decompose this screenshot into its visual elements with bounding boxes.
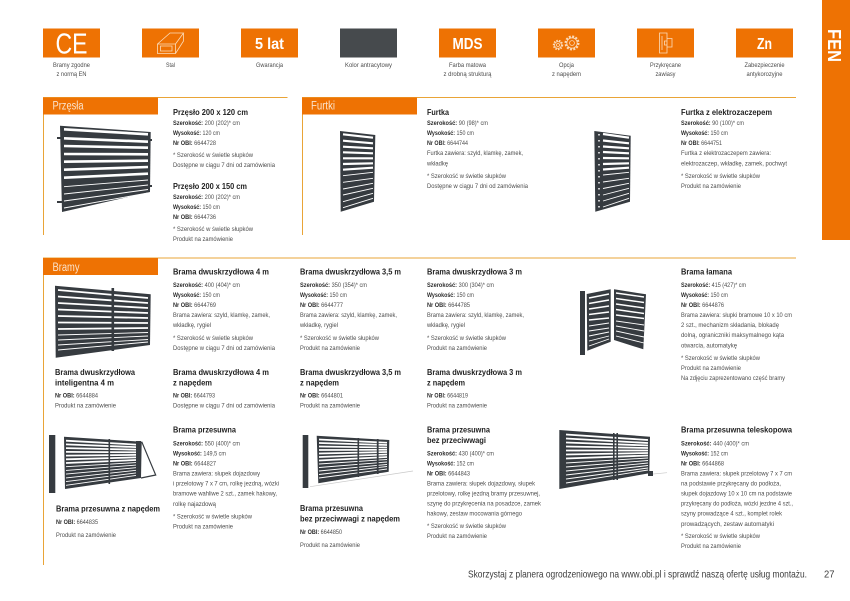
caption: warranty: Gwarancja — [256, 62, 283, 69]
icon: gears — [538, 28, 595, 58]
product: Przęsło 200 x 120: Szerokość: 200 (202)* cm — [173, 120, 240, 127]
product: Przęsło 200 x 150: Przęsło 200 x 150 cm — [173, 181, 247, 191]
product: Brama dwuskrzydłowa 3 m: Wysokość: 150 cm — [427, 292, 474, 299]
product: Furtka z elektrozaczepem: elektrozaczep, wkładkę, zamek, pochwyt — [681, 160, 787, 168]
product: Brama dwuskrzydłowa 3 m z napędem: Brama dwuskrzydłowa 3 m — [427, 367, 522, 377]
product: Brama przesuwna z napędem: Nr OBI: 6644835 — [56, 519, 98, 526]
product: Brama przesuwna teleskopowa: Nr OBI: 6644868 — [681, 460, 724, 468]
product: Brama przesuwna bez przeciwwagi: * Szerokość w świetle słupków — [427, 523, 506, 530]
product photo: sliding gate with tail — [49, 435, 156, 493]
caption: CE — [53, 62, 90, 78]
product: Furtka z elektrozaczepem: Furtka z elektrozaczepem zawiera: — [681, 150, 771, 157]
product: Przęsło 200 x 150: Szerokość: 200 (202)* cm — [173, 194, 240, 201]
product: Brama przesuwna teleskopowa: * Szerokość w świetle słupków — [681, 533, 760, 540]
product: Przęsło 200 x 150: Wysokość: 150 cm — [173, 204, 220, 211]
product: Przęsło 200 x 150: Nr OBI: 6644736 — [173, 214, 216, 221]
product: Brama łamana — [681, 266, 792, 382]
product photo: wicket with electric strike — [594, 131, 631, 212]
product: Furtka z elektrozaczepem: Furtka z elektrozaczepem — [681, 107, 772, 117]
product: Brama dwuskrzydłowa inteligentna 4 m: inteligentna 4 m — [55, 378, 114, 388]
product: Brama dwuskrzydłowa 3 m: Szerokość: 300 (304)* cm — [427, 282, 494, 289]
product: Brama dwuskrzydłowa 3,5 m z napędem: Nr OBI: 6644801 — [300, 392, 343, 400]
product: Furtka: Furtka zawiera: szyld, klamkę, zamek, — [427, 150, 523, 157]
product: Brama przesuwna teleskopowa: prowadzących, zestaw automatyki — [681, 521, 774, 528]
product: Brama przesuwna teleskopowa: Wysokość: 152 cm — [681, 450, 728, 458]
panel: Furtki header: Furtki — [311, 100, 335, 112]
product: Brama przesuwna teleskopowa: szyny prowadzące 4 szt., komplet rolek — [681, 510, 783, 518]
swatch: anthracite colour — [340, 28, 397, 58]
product: Brama łamana: Produkt na zamówienie — [681, 365, 741, 372]
product: Furtka: wkładkę — [426, 160, 448, 168]
product: Brama dwuskrzydłowa 3,5 m z napędem: Brama dwuskrzydłowa 3,5 m — [300, 367, 401, 377]
product: Brama dwuskrzydłowa 3 m: wkładkę, rygiel — [426, 322, 465, 329]
product: Brama przesuwna bez przeciwwagi: hakowy, zestaw mocowania górnego — [427, 510, 522, 518]
product: Brama przesuwna: Nr OBI: 6644827 — [173, 460, 216, 468]
product: Brama dwuskrzydłowa 4 m z napędem — [173, 367, 275, 410]
product: Przęsło 200 x 120: Dostępne w ciągu 7 dni od zamówienia — [173, 162, 275, 169]
product: Brama łamana: otwarcia, automatykę — [681, 342, 737, 350]
product photo: telescopic sliding gate — [559, 430, 667, 489]
product: Brama przesuwna bez przeciwwagi: Produkt na zamówienie — [427, 533, 487, 540]
product: Brama dwuskrzydłowa 3,5 m — [299, 266, 401, 352]
caption: CE: Bramy zgodne — [53, 62, 90, 69]
product: Furtka: Nr OBI: 6644744 — [427, 140, 468, 147]
product photo: double-leaf gate — [55, 286, 151, 358]
product: Furtka z elektrozaczepem: * Szerokość w świetle słupków — [681, 173, 760, 180]
product: Brama dwuskrzydłowa 3,5 m z napędem — [300, 367, 401, 410]
product: Przęsło 200 x 120: Przęsło 200 x 120 cm — [173, 107, 248, 117]
product: Brama dwuskrzydłowa 3 m: Brama dwuskrzydłowa 3 m — [427, 266, 522, 276]
product: Brama przesuwna bez przeciwwagi: Szerokość: 430 (400)* cm — [427, 450, 494, 458]
product: Brama dwuskrzydłowa 3 m: Brama zawiera: szyld, klamkę, zamek, — [427, 312, 524, 319]
product: Brama przesuwna z napędem: Brama przesuwna z napędem — [56, 504, 160, 514]
product: Furtka z elektrozaczepem: Wysokość: 150 cm — [681, 130, 728, 137]
product: Brama dwuskrzydłowa 3,5 m: Produkt na zamówienie — [300, 345, 360, 352]
caption: hinges: Przykręcane — [650, 62, 681, 69]
product: Brama dwuskrzydłowa 3 m z napędem: Nr OBI: 6644819 — [427, 392, 468, 400]
icon: MDS paint — [439, 28, 496, 58]
product: Przęsło 200 x 120: * Szerokość w świetle słupków — [173, 152, 253, 159]
product: Brama dwuskrzydłowa 3 m z napędem: Produkt na zamówienie — [427, 402, 487, 410]
product: Brama dwuskrzydłowa 4 m: Dostępne w ciągu 7 dni od zamówienia — [173, 345, 275, 352]
product: Brama przesuwna: i przelotowy 7 x 7 cm, rolkę jezdną, wózki — [173, 480, 279, 488]
product: Brama łamana: 2 szt., mechanizm składania, blokadę — [681, 322, 779, 329]
product: Brama dwuskrzydłowa 4 m: Nr OBI: 6644769 — [173, 302, 216, 309]
product: Brama dwuskrzydłowa 4 m: Wysokość: 150 cm — [173, 292, 220, 299]
product: Furtka z elektrozaczepem — [681, 107, 787, 190]
caption: option with motor — [552, 62, 581, 78]
product: Brama dwuskrzydłowa 3,5 m z napędem: z napędem — [300, 378, 339, 388]
product: Brama przesuwna bez przeciwwagi z napędem: Nr OBI: 6644850 — [300, 529, 342, 536]
product: Brama łamana: dolną, ograniczniki maksymalnego kąta — [681, 332, 784, 339]
product: Brama przesuwna — [173, 424, 279, 530]
product: Furtka: Dostępne w ciągu 7 dni od zamówienia — [427, 183, 528, 190]
product: Brama dwuskrzydłowa 3,5 m: Brama dwuskrzydłowa 3,5 m — [300, 266, 401, 276]
product: Brama przesuwna bez przeciwwagi: Nr OBI: 6644843 — [427, 470, 470, 478]
product: Furtka: * Szerokość w świetle słupków — [427, 173, 506, 180]
caption: hinges: zawiasy — [656, 71, 676, 78]
product: Brama dwuskrzydłowa 3 m z napędem — [427, 367, 522, 410]
caption: paint: z drobną strukturą — [444, 71, 492, 78]
caption: CE: z normą EN — [56, 71, 87, 78]
product: Brama przesuwna bez przeciwwagi: Wysokość: 152 cm — [427, 460, 474, 468]
product: Brama przesuwna: * Szerokość w świetle słupków — [173, 514, 252, 520]
product: Brama przesuwna: Szerokość: 550 (400)* cm — [173, 440, 240, 448]
product: Brama przesuwna teleskopowa: słupek dojazdowy 10 x 10 cm na podstawie — [681, 490, 792, 498]
product: Brama przesuwna z napędem: Produkt na zamówienie — [56, 532, 116, 539]
product: Brama dwuskrzydłowa 3 m: * Szerokość w świetle słupków — [427, 335, 506, 342]
product: Brama przesuwna: Brama zawiera: słupek dojazdowy — [173, 470, 261, 478]
caption: anticorrosion — [744, 62, 785, 78]
product: Przęsło 200 x 120: Nr OBI: 6644728 — [173, 140, 216, 147]
product: Brama łamana: Brama zawiera: słupki bramowe 10 x 10 cm — [681, 312, 792, 319]
product: Brama dwuskrzydłowa 3,5 m: Wysokość: 150 cm — [300, 292, 347, 299]
caption: anticorrosion: antykorozyjne — [746, 71, 783, 78]
product: Brama przesuwna bez przeciwwagi — [427, 424, 542, 540]
product: Furtka: Furtka — [427, 107, 449, 117]
product: Brama łamana: Szerokość: 415 (427)* cm — [681, 282, 746, 289]
product: Brama przesuwna bez przeciwwagi z napędem: Brama przesuwna — [300, 503, 363, 513]
product: Brama łamana: * Szerokość w świetle słupków — [681, 355, 760, 362]
product: Brama dwuskrzydłowa 3,5 m: wkładkę, rygiel — [299, 322, 338, 329]
caption: colour: Kolor antracytowy — [345, 62, 393, 69]
product: Furtka — [426, 107, 528, 190]
product: Przęsło 200 x 150 — [173, 181, 253, 243]
panel: Przęsła header — [43, 97, 288, 235]
product: Brama dwuskrzydłowa 3,5 m: Brama zawiera: szyld, klamkę, zamek, — [300, 312, 397, 319]
icon: hinge — [637, 28, 694, 58]
product: Brama przesuwna: Wysokość: 149,5 cm — [173, 450, 226, 458]
product: Brama dwuskrzydłowa 4 m: Brama zawiera: szyld, klamkę, zamek, — [173, 312, 270, 319]
product: Furtka z elektrozaczepem: Produkt na zamówienie — [681, 183, 741, 190]
product: Brama przesuwna teleskopowa: Produkt na zamówienie — [681, 543, 741, 550]
icon: zinc: Zn — [757, 36, 772, 53]
product: Brama przesuwna bez przeciwwagi z napędem: bez przeciwwagi z napędem — [300, 514, 400, 524]
product: Brama przesuwna: Produkt na zamówienie — [173, 524, 233, 530]
product photo: fence panel — [57, 126, 152, 212]
product: Brama łamana: Brama łamana — [681, 266, 732, 276]
product: Brama dwuskrzydłowa 4 m z napędem: Dostępne w ciągu 7 dni od zamówienia — [173, 402, 275, 410]
product: Brama dwuskrzydłowa 3,5 m: Szerokość: 350 (354)* cm — [300, 282, 367, 289]
product: Brama dwuskrzydłowa 3 m: Produkt na zamówienie — [427, 345, 487, 352]
product: Brama przesuwna z napędem — [56, 504, 160, 539]
product: Brama przesuwna bez przeciwwagi: przelotowy, rolkę jezdną bramy przesuwnej, — [427, 490, 540, 498]
icon: MDS paint: MDS — [452, 36, 483, 53]
product: Brama dwuskrzydłowa 4 m: Brama dwuskrzydłowa 4 m — [173, 266, 269, 276]
product: Furtka z elektrozaczepem: Szerokość: 90 (100)* cm — [681, 120, 744, 127]
caption: hinges — [650, 62, 681, 78]
product: Brama dwuskrzydłowa 4 m z napędem: z napędem — [173, 378, 212, 388]
product: Brama dwuskrzydłowa 3,5 m: * Szerokość w świetle słupków — [300, 335, 379, 342]
product: Brama przesuwna bez przeciwwagi: Brama przesuwna — [427, 424, 490, 434]
product: Przęsło 200 x 150: * Szerokość w świetle słupków — [173, 226, 253, 233]
product: Brama przesuwna teleskopowa — [681, 424, 793, 550]
panel: Furtki header — [302, 97, 796, 235]
product: Brama dwuskrzydłowa inteligentna 4 m: Nr OBI: 6644884 — [55, 392, 98, 400]
icon: 5 years warranty: 5 lat — [255, 36, 285, 53]
icon: zinc — [736, 28, 793, 58]
product: Brama dwuskrzydłowa inteligentna 4 m: Produkt na zamówienie — [55, 402, 116, 410]
product: Brama dwuskrzydłowa inteligentna 4 m — [55, 367, 135, 410]
product: Brama przesuwna teleskopowa: Brama zawiera: słupek przelotowy 7 x 7 cm — [681, 470, 792, 478]
page number: 27 — [824, 568, 835, 580]
caption: steel: Stal — [166, 62, 175, 69]
caption: anticorrosion: Zabezpieczenie — [744, 62, 785, 69]
product: Brama dwuskrzydłowa 4 m z napędem: Nr OBI: 6644793 — [173, 392, 215, 400]
product: Przęsło 200 x 120: Wysokość: 120 cm — [173, 130, 220, 137]
product: Brama przesuwna bez przeciwwagi z napędem: Produkt na zamówienie — [300, 542, 360, 549]
product: Brama przesuwna bez przeciwwagi z napędem — [300, 503, 400, 549]
product: Brama łamana: Wysokość: 150 cm — [681, 292, 728, 299]
product: Furtka z elektrozaczepem: Nr OBI: 6644751 — [681, 140, 722, 147]
product: Brama przesuwna teleskopowa: Szerokość: 440 (400)* cm — [681, 440, 749, 448]
caption: option with motor: Opcja — [559, 62, 574, 69]
product: Brama dwuskrzydłowa 3,5 m: Nr OBI: 6644777 — [300, 302, 343, 309]
product: Brama dwuskrzydłowa 4 m: * Szerokość w świetle słupków — [173, 335, 253, 342]
product: Przęsło 200 x 120 — [173, 107, 275, 169]
product: Przęsło 200 x 150: Produkt na zamówienie — [173, 236, 233, 243]
sidebar tab: FEN — [822, 0, 850, 240]
product photo: cantilever-free sliding gate — [303, 435, 413, 488]
product: Furtka: Szerokość: 90 (98)* cm — [427, 120, 488, 127]
product: Brama dwuskrzydłowa 3 m — [426, 266, 524, 352]
icon: 5 years warranty — [241, 28, 298, 58]
product photo: wicket — [340, 131, 375, 212]
product: Brama przesuwna teleskopowa: na podstawie przykręcany do podłoża, — [681, 480, 781, 488]
product: Furtka: Wysokość: 150 cm — [427, 130, 474, 137]
icon: steel profile — [142, 28, 199, 58]
panel: Bramy header — [43, 258, 796, 565]
product: Brama dwuskrzydłowa 4 m: Szerokość: 400 (404)* cm — [173, 282, 240, 289]
panel: Przęsła header: Przęsła — [52, 100, 84, 112]
product: Brama dwuskrzydłowa 4 m z napędem: Brama dwuskrzydłowa 4 m — [173, 367, 269, 377]
product: Brama przesuwna teleskopowa: przykręcany do podłoża, wózki jezdne 4 szt., — [681, 500, 793, 508]
product: Brama przesuwna teleskopowa: Brama przesuwna teleskopowa — [681, 424, 792, 434]
product: Brama łamana: Na zdjęciu zaprezentowano część bramy — [681, 375, 786, 382]
product: Brama przesuwna: rolkę najazdową — [173, 501, 216, 508]
caption: option with motor: z napędem — [552, 71, 581, 78]
caption: paint — [444, 62, 492, 78]
product: Brama dwuskrzydłowa 3 m z napędem: z napędem — [427, 378, 465, 388]
product: Brama dwuskrzydłowa 4 m: wkładkę, rygiel — [172, 322, 211, 329]
product: Brama dwuskrzydłowa inteligentna 4 m: Brama dwuskrzydłowa — [55, 367, 135, 377]
product photo: folding gate — [580, 289, 646, 355]
product: Brama przesuwna bez przeciwwagi: szynę do przykręcenia na posadzce, zamek — [427, 500, 542, 508]
product: Brama przesuwna bez przeciwwagi: Brama zawiera: słupek dojazdowy, słupek — [427, 480, 536, 488]
product: Brama przesuwna: Brama przesuwna — [173, 424, 236, 434]
product: Brama przesuwna: bramowe wahliwe 2 szt., zamek hakowy, — [173, 490, 277, 498]
panel: Bramy header: Bramy — [52, 262, 80, 274]
caption: paint: Farba matowa — [449, 62, 486, 69]
product: Brama łamana: Nr OBI: 6644876 — [681, 302, 724, 309]
sidebar tab: FEN: FEN — [824, 29, 844, 62]
product: Brama dwuskrzydłowa 4 m — [172, 266, 275, 352]
product: Brama dwuskrzydłowa 3,5 m z napędem: Produkt na zamówienie — [300, 402, 360, 410]
product: Brama dwuskrzydłowa 3 m: Nr OBI: 6644785 — [427, 302, 470, 309]
product: Brama przesuwna bez przeciwwagi: bez przeciwwagi — [427, 435, 486, 445]
icon: CE mark: CE — [56, 28, 88, 60]
